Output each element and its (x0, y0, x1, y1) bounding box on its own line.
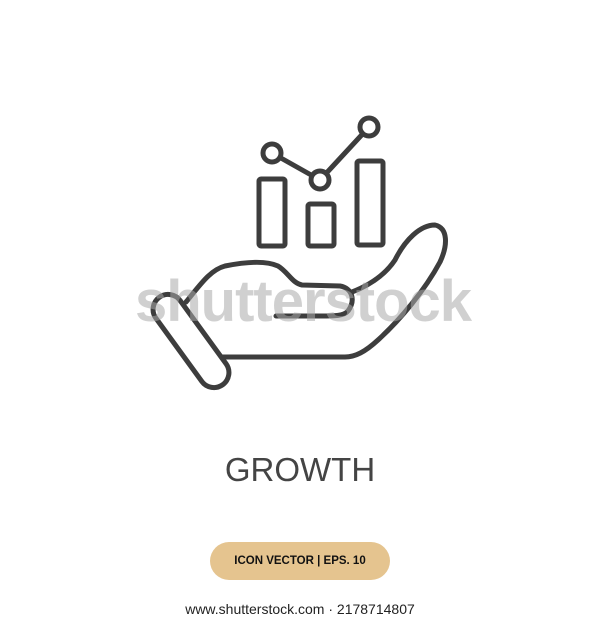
watermark: shutterstock (135, 269, 471, 334)
title: GROWTH (225, 451, 375, 488)
line chart with dots (263, 118, 378, 189)
footer url: www.shutterstock.com · 2178714807 (185, 601, 415, 617)
icon: hand holding growth chart (150, 116, 448, 390)
hand (147, 225, 445, 394)
bar chart (259, 161, 383, 246)
badge: icon vector: ICON VECTOR | EPS. 10 (234, 555, 366, 567)
badge: icon vector (210, 542, 390, 580)
